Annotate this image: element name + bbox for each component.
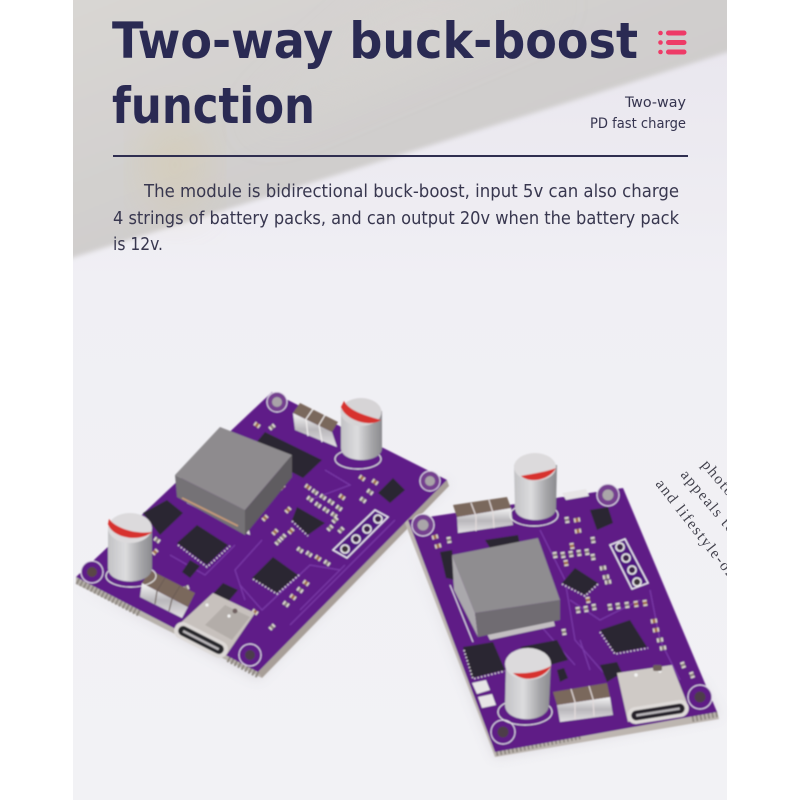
paper text background [656, 460, 727, 576]
left board edge [76, 577, 262, 678]
board shadows [76, 480, 720, 758]
left board USB-C connector [171, 593, 255, 661]
title [112, 12, 638, 135]
left board electrolytic capacitor bottom [106, 513, 156, 587]
divider rule [113, 155, 688, 157]
title: Two-way buck-boost [112, 12, 638, 70]
photo: left PCB module [76, 392, 449, 678]
right board edges [405, 520, 719, 757]
left board inductor [175, 427, 292, 535]
body paragraph: The module is bidirectional buck-boost, input 5v can also charge [143, 181, 679, 202]
left board mounting holes [81, 392, 440, 666]
right board electrolytic capacitor bottom [498, 648, 552, 725]
right board USB-C connector [617, 665, 690, 725]
left board PCB [76, 392, 447, 672]
left board chip pins [178, 521, 308, 594]
subtitle: two-way PD fast charge: Two-way [624, 95, 687, 111]
right board traces [540, 530, 680, 680]
right board mounting holes [412, 484, 712, 744]
title: function [112, 77, 315, 135]
left board castellations [77, 581, 258, 675]
right board pin header [610, 539, 648, 589]
paper text background: and lifestyle-or [652, 476, 739, 581]
body paragraph [113, 181, 680, 255]
left board ceramic capacitors top [293, 403, 338, 447]
right board ceramic capacitors bottom [553, 683, 613, 722]
right board chips [440, 507, 647, 682]
left board pin header [333, 510, 388, 558]
paper text background: appeals to [677, 467, 740, 538]
body paragraph: is 12v. [113, 234, 163, 255]
left board traces [170, 470, 395, 625]
left board electrolytic capacitor top [335, 398, 382, 469]
right board silk outline [450, 585, 473, 642]
left board chips [143, 432, 405, 603]
right board PCB [408, 488, 717, 752]
right board SMD clusters [432, 517, 695, 679]
left board SMD clusters [151, 422, 379, 631]
body paragraph: 4 strings of battery packs, and can output 20v when the battery pack [113, 208, 680, 229]
left board ceramic capacitors bottom [140, 570, 195, 618]
paper text background: photo [698, 457, 739, 501]
photo: right PCB module [405, 453, 719, 757]
right board electrolytic capacitor top [510, 453, 558, 526]
right board inductor [452, 538, 560, 640]
subtitle: two-way PD fast charge: PD fast charge [590, 116, 686, 132]
icon: list [658, 30, 686, 54]
right board ceramic capacitors top [453, 497, 513, 533]
right board notches [472, 489, 589, 708]
right board castellations [496, 714, 718, 753]
subtitle: two-way PD fast charge [590, 95, 687, 132]
right board chip pins [464, 584, 648, 679]
